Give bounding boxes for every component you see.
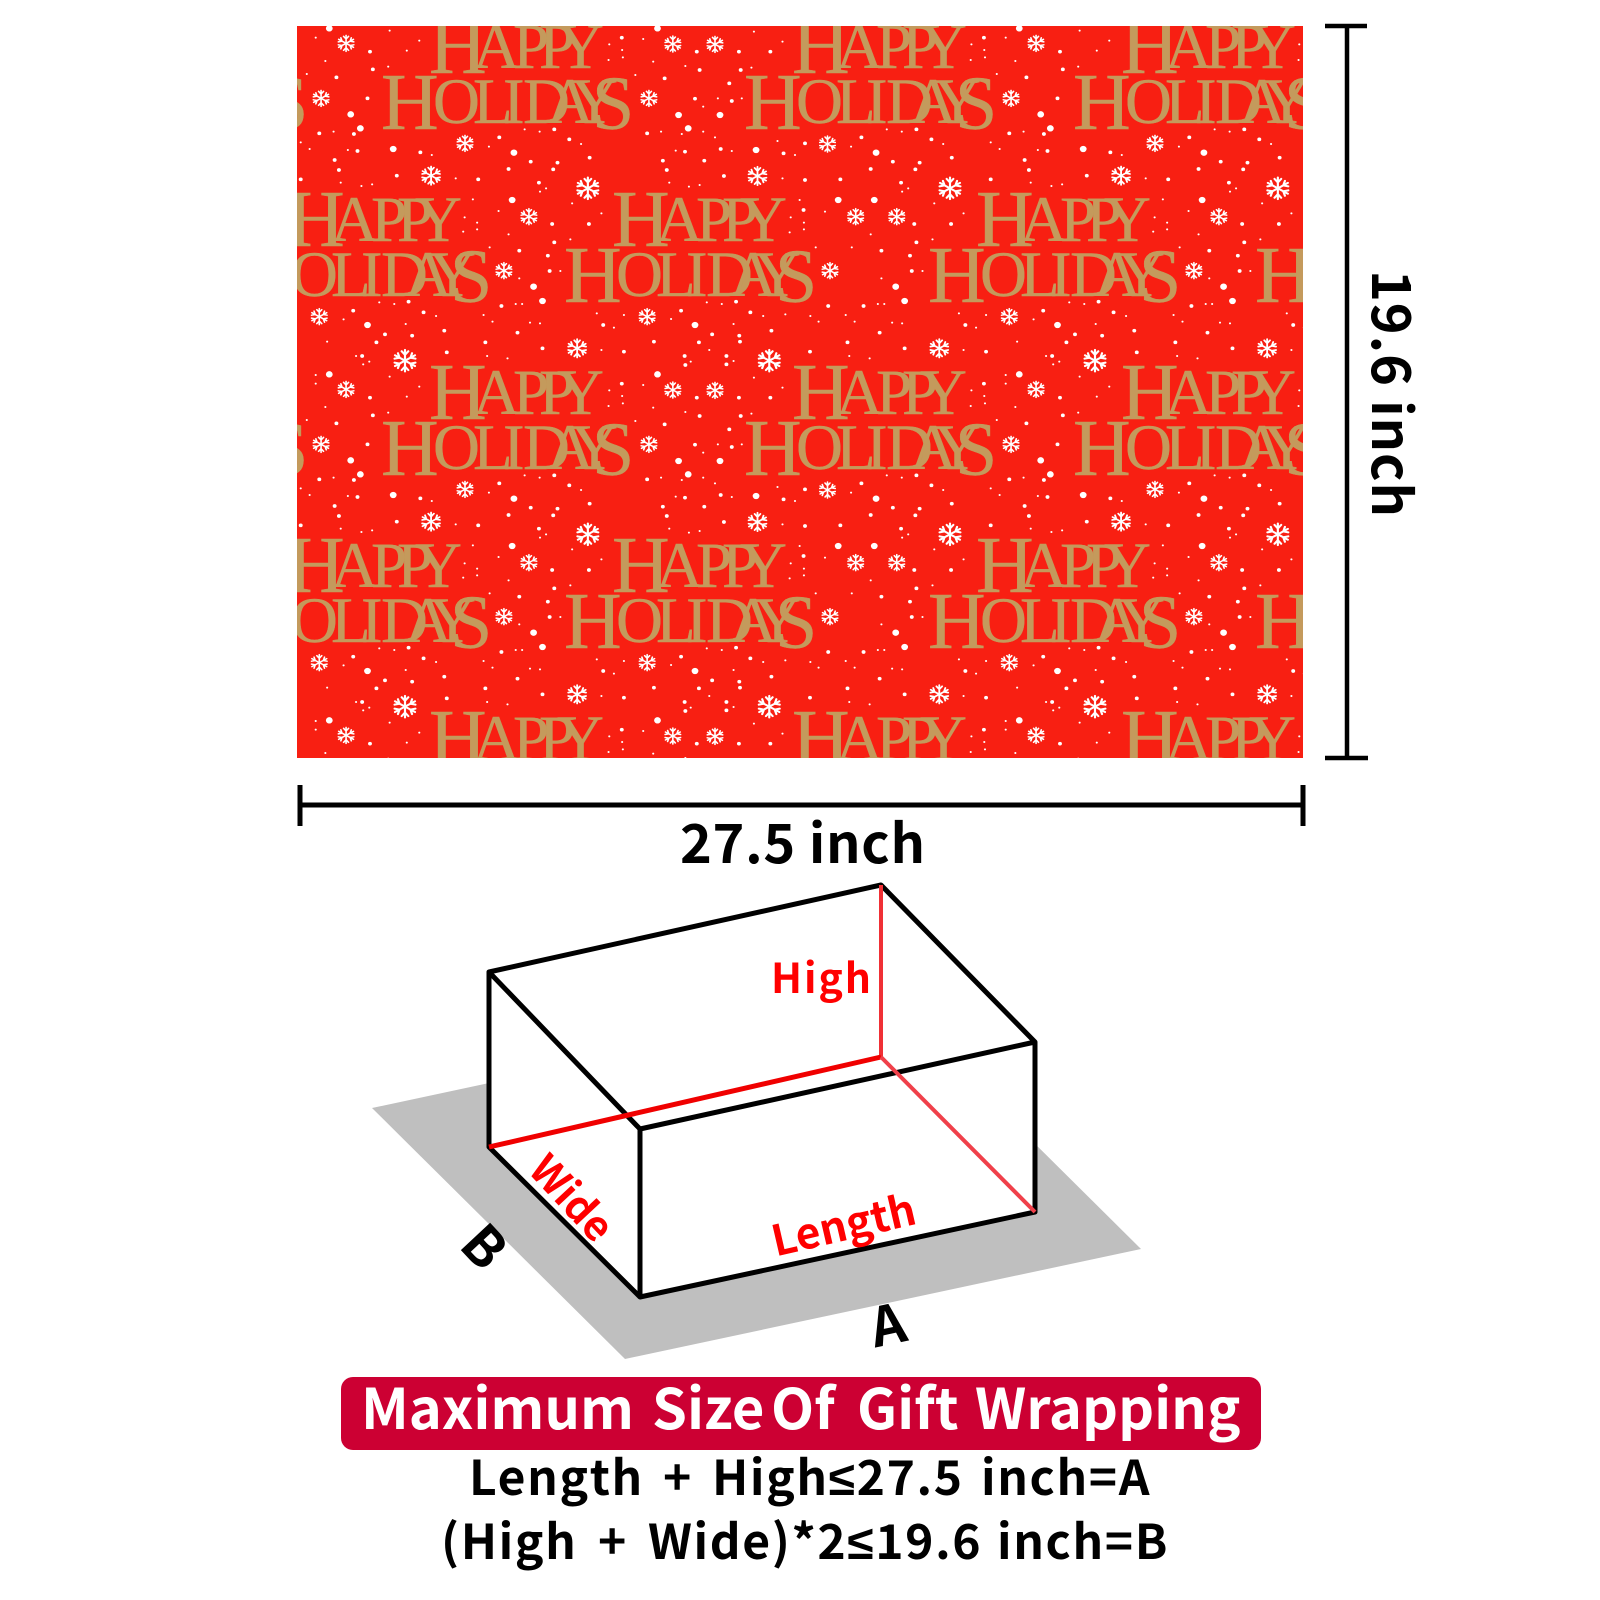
gold lettering: Happy Holidays repeats: H bbox=[1073, 59, 1131, 147]
gold lettering: Happy Holidays repeats: H bbox=[976, 522, 1034, 610]
gold lettering: Happy Holidays repeats: H bbox=[239, 578, 297, 666]
formula: high + wide: Wide)*2 bbox=[648, 1503, 847, 1573]
gold lettering: Happy Holidays repeats: OLIDAY bbox=[107, 412, 292, 484]
gold lettering: Happy Holidays repeats: H bbox=[1121, 349, 1179, 437]
gold lettering: Happy Holidays repeats: H bbox=[928, 232, 986, 320]
gold lettering: Happy Holidays repeats: APPY bbox=[1165, 11, 1296, 83]
box fill bbox=[489, 885, 1035, 1297]
formula: length + high: Length bbox=[469, 1439, 644, 1509]
gold lettering: Happy Holidays repeats: H bbox=[429, 349, 487, 437]
box red inner edges bbox=[879, 885, 883, 1057]
gold lettering: Happy Holidays repeats: APPY bbox=[656, 530, 787, 602]
box black edges bbox=[489, 885, 1035, 1297]
gold lettering: Happy Holidays repeats: H bbox=[564, 578, 622, 666]
box diagram on grey sheet bbox=[372, 885, 1141, 1363]
gold lettering: Happy Holidays repeats: S bbox=[1466, 235, 1508, 319]
formula: length + high: High bbox=[712, 1439, 829, 1509]
formula: high + wide: inch=B bbox=[997, 1503, 1169, 1573]
gold lettering: Happy Holidays repeats: H bbox=[55, 405, 113, 493]
gold lettering: Happy Holidays repeats: H bbox=[239, 232, 297, 320]
gold lettering: Happy Holidays repeats: S bbox=[1139, 235, 1181, 319]
gold lettering: Happy Holidays repeats: APPY bbox=[1165, 357, 1296, 429]
panel: wrapping paper pattern bbox=[297, 26, 1303, 758]
gold lettering: Happy Holidays repeats: APPY bbox=[836, 11, 967, 83]
formula: high + wide: (High bbox=[441, 1503, 577, 1573]
formula: length + high: inch=A bbox=[981, 1439, 1151, 1509]
gold lettering: Happy Holidays repeats: APPY bbox=[473, 703, 604, 775]
gold lettering: Happy Holidays repeats: H bbox=[429, 3, 487, 91]
gold lettering: Happy Holidays repeats: S bbox=[1139, 581, 1181, 665]
gold lettering: Happy Holidays repeats: S bbox=[1466, 581, 1508, 665]
label: High: High bbox=[771, 945, 871, 1005]
gold lettering: Happy Holidays repeats: S bbox=[955, 408, 997, 492]
gold lettering: Happy Holidays repeats: OLIDAY bbox=[433, 412, 618, 484]
gold lettering: Happy Holidays repeats: OLIDAY bbox=[291, 585, 476, 657]
gold lettering: Happy Holidays repeats: H bbox=[55, 59, 113, 147]
grey wrapping sheet bbox=[372, 998, 1141, 1359]
height dimension: 19.6 inch: 19.6 inch bbox=[1356, 270, 1435, 517]
gold lettering: Happy Holidays repeats: S bbox=[1284, 408, 1326, 492]
gold lettering: Happy Holidays repeats: OLIDAY bbox=[1307, 585, 1492, 657]
gold lettering: Happy Holidays repeats: APPY bbox=[656, 184, 787, 256]
gold lettering: Happy Holidays repeats: APPY bbox=[1165, 703, 1296, 775]
gold lettering: Happy Holidays repeats: H bbox=[744, 405, 802, 493]
banner: Maximum Size Of Gift Wrapping: Of bbox=[771, 1365, 837, 1446]
gold lettering: Happy Holidays repeats: H bbox=[1255, 578, 1313, 666]
gold lettering: Happy Holidays repeats: H bbox=[792, 695, 850, 783]
gold lettering: Happy Holidays repeats: H bbox=[976, 176, 1034, 264]
gold lettering: Happy Holidays repeats: H bbox=[744, 59, 802, 147]
gold lettering: Happy Holidays repeats: H bbox=[612, 522, 670, 610]
gold lettering: Happy Holidays repeats: APPY bbox=[836, 703, 967, 775]
banner: Maximum Size Of Gift Wrapping: Size bbox=[652, 1365, 764, 1446]
label: Length: Length bbox=[765, 1177, 921, 1269]
gold lettering: Happy Holidays repeats: S bbox=[955, 62, 997, 146]
gold lettering: Happy Holidays repeats: H bbox=[1073, 405, 1131, 493]
gold lettering: Happy Holidays repeats: H bbox=[429, 695, 487, 783]
gold lettering: Happy Holidays repeats: S bbox=[775, 235, 817, 319]
gold lettering: Happy Holidays repeats: OLIDAY bbox=[796, 66, 981, 138]
gold lettering: Happy Holidays repeats: H bbox=[792, 3, 850, 91]
gold lettering: Happy Holidays repeats: OLIDAY bbox=[796, 412, 981, 484]
formula: high + wide: + bbox=[598, 1503, 628, 1573]
gold lettering: Happy Holidays repeats: OLIDAY bbox=[107, 66, 292, 138]
label: B: B bbox=[446, 1204, 529, 1284]
gold lettering: Happy Holidays repeats: APPY bbox=[331, 184, 462, 256]
gold lettering: Happy Holidays repeats: APPY bbox=[1020, 530, 1151, 602]
snow dots and snowflakes bbox=[301, 28, 1600, 1067]
gold lettering: Happy Holidays repeats: H bbox=[1121, 3, 1179, 91]
gold lettering: Happy Holidays repeats: S bbox=[450, 235, 492, 319]
gold lettering: Happy Holidays repeats: APPY bbox=[473, 11, 604, 83]
gold lettering: Happy Holidays repeats: OLIDAY bbox=[616, 585, 801, 657]
width dimension: 27.5 inch bbox=[300, 785, 1303, 879]
gold lettering: Happy Holidays repeats: H bbox=[564, 232, 622, 320]
banner: Maximum Size Of Gift Wrapping: Wrapping bbox=[975, 1365, 1240, 1446]
gold lettering: Happy Holidays repeats: APPY bbox=[331, 530, 462, 602]
gold lettering: Happy Holidays repeats: H bbox=[381, 59, 439, 147]
banner: Maximum Size Of Gift Wrapping: Gift bbox=[857, 1365, 959, 1446]
gold lettering: Happy Holidays repeats: S bbox=[266, 408, 308, 492]
gold lettering: Happy Holidays repeats: S bbox=[450, 581, 492, 665]
gold lettering: Happy Holidays repeats: H bbox=[1255, 232, 1313, 320]
gold lettering: Happy Holidays repeats: H bbox=[612, 176, 670, 264]
gold lettering: Happy Holidays repeats: S bbox=[592, 62, 634, 146]
gold lettering: Happy Holidays repeats: OLIDAY bbox=[1307, 239, 1492, 311]
formula: high + wide: ≤19.6 bbox=[847, 1503, 982, 1573]
gold lettering: Happy Holidays repeats: OLIDAY bbox=[291, 239, 476, 311]
gold lettering: Happy Holidays repeats: OLIDAY bbox=[616, 239, 801, 311]
label: A: A bbox=[861, 1279, 913, 1363]
gold lettering: Happy Holidays repeats: H bbox=[287, 522, 345, 610]
gold lettering: Happy Holidays repeats: H bbox=[1121, 695, 1179, 783]
banner: Maximum Size Of Gift Wrapping bbox=[341, 1365, 1261, 1450]
gold lettering: Happy Holidays repeats: H bbox=[792, 349, 850, 437]
label: Wide: Wide bbox=[518, 1139, 630, 1253]
gold lettering: Happy Holidays repeats: S bbox=[775, 581, 817, 665]
gold lettering: Happy Holidays repeats: APPY bbox=[836, 357, 967, 429]
gold lettering: Happy Holidays repeats: APPY bbox=[1020, 184, 1151, 256]
gold lettering: Happy Holidays repeats: S bbox=[1284, 62, 1326, 146]
gold lettering: Happy Holidays repeats: APPY bbox=[473, 357, 604, 429]
gold lettering: Happy Holidays repeats: H bbox=[381, 405, 439, 493]
gold lettering: Happy Holidays repeats: H bbox=[287, 176, 345, 264]
gold lettering: Happy Holidays repeats bbox=[297, 26, 1303, 758]
banner: Maximum Size Of Gift Wrapping: Maximum bbox=[361, 1365, 634, 1446]
gold lettering: Happy Holidays repeats: S bbox=[592, 408, 634, 492]
gold lettering: Happy Holidays repeats: S bbox=[266, 62, 308, 146]
width dimension: 27.5 inch: 27.5 inch bbox=[680, 800, 925, 879]
gold lettering: Happy Holidays repeats: OLIDAY bbox=[980, 239, 1165, 311]
height dimension: 19.6 inch bbox=[1325, 26, 1435, 758]
gold lettering: Happy Holidays repeats: OLIDAY bbox=[433, 66, 618, 138]
gold lettering: Happy Holidays repeats: OLIDAY bbox=[1125, 412, 1310, 484]
formula: length + high: + bbox=[663, 1439, 693, 1509]
gold lettering: Happy Holidays repeats: OLIDAY bbox=[980, 585, 1165, 657]
formula: length + high: ≤27.5 bbox=[829, 1439, 964, 1509]
gold lettering: Happy Holidays repeats: H bbox=[928, 578, 986, 666]
gold lettering: Happy Holidays repeats: OLIDAY bbox=[1125, 66, 1310, 138]
